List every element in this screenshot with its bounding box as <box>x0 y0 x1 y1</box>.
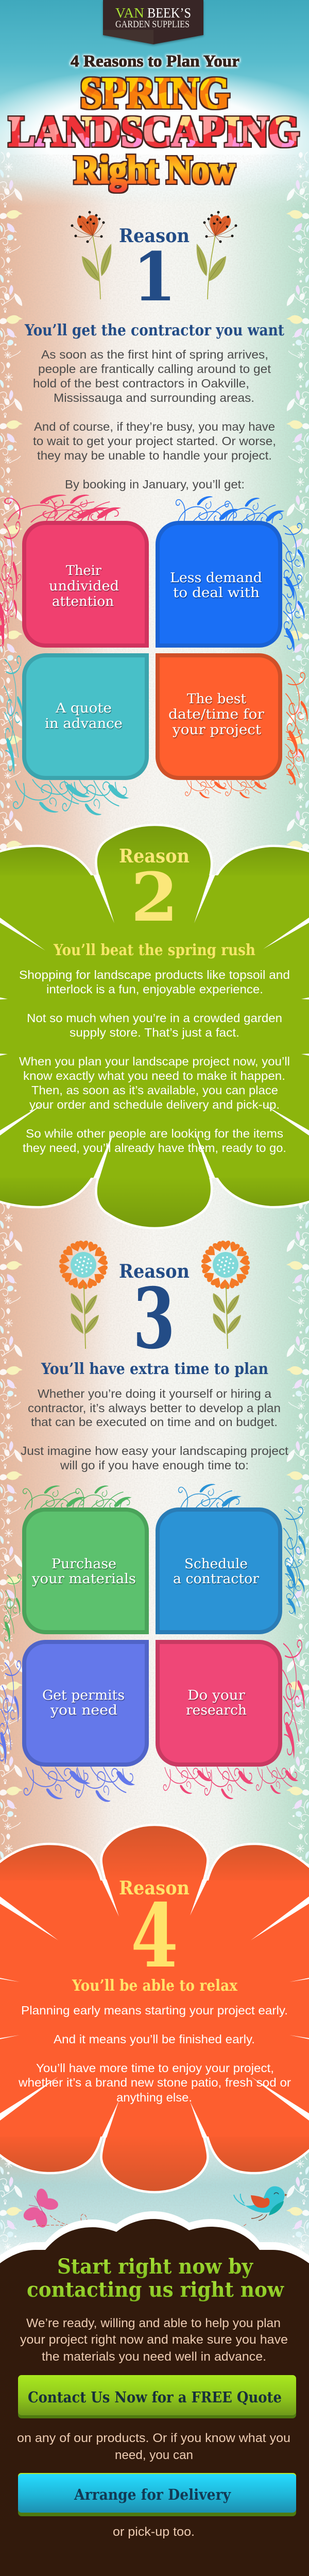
decorative swirls: benefits <box>0 495 307 815</box>
reason 2 body text: your order and schedule delivery and pick-up. <box>29 1098 280 1111</box>
button: arrange for delivery <box>18 2473 296 2516</box>
task: purchase your materials <box>22 1507 149 1634</box>
reason 2 body text: they need, you’ll already have them, ready to go. <box>23 1141 286 1155</box>
benefit: less demand to deal with: Less demand <box>170 570 262 586</box>
cta heading <box>27 2255 284 2302</box>
task: get permits you need: Get permits <box>42 1687 125 1703</box>
cta body text: the materials you need well in advance. <box>42 2350 266 2364</box>
green flower shape <box>0 825 309 1228</box>
title line: right now: Right Now <box>74 148 235 192</box>
benefit: the best date/time: date/time for <box>168 706 264 722</box>
text: on any of our products: on any of our products. Or if you know what you <box>17 2431 290 2445</box>
title line: 4 reasons: 4 Reasons to Plan Your <box>71 52 239 70</box>
reason 2 body text: know exactly what you need to make it happen. <box>23 1069 285 1082</box>
reason 2 body text: So while other people are looking for the items <box>26 1127 283 1140</box>
reason 1 body text: By booking in January, you’ll get: <box>65 478 245 491</box>
logo banner: VAN <box>115 5 144 21</box>
reason 1 body text: hold of the best contractors in Oakville, <box>33 377 249 390</box>
reason 2 body text: Not so much when you’re in a crowded garden <box>27 1011 282 1025</box>
reason 1 header <box>71 211 237 316</box>
task: get permits you need <box>22 1640 149 1767</box>
panel: reason 2 green flower <box>0 825 309 1228</box>
reason 2 body text: When you plan your landscape project now, you’ll <box>19 1055 290 1068</box>
task: purchase your materials: Purchase <box>52 1556 116 1572</box>
benefit: a quote in advance <box>22 653 149 780</box>
reason 3 body text <box>21 1387 289 1472</box>
task: schedule a contractor <box>156 1507 282 1634</box>
reason 1 body text: people are frantically calling around to get <box>38 362 271 376</box>
reason 1 number: 1 <box>133 238 176 316</box>
benefit: the best date/time: your project <box>172 722 261 738</box>
button: contact us <box>18 2375 296 2418</box>
reason 3 body text: Whether you’re doing it yourself or hiring a <box>38 1387 271 1400</box>
reason 2 body text: Shopping for landscape products like topsoil and <box>19 968 290 981</box>
reason 4 number: 4 <box>131 1885 178 1988</box>
text: on any of our products: need, you can <box>115 2448 193 2462</box>
cta heading: Start right now by <box>57 2255 254 2279</box>
reason 2 number: 2 <box>131 858 178 937</box>
reason 4 body text: And it means you’ll be finished early. <box>54 2032 255 2046</box>
reason 4 body text: whether it’s a brand new stone patio, fresh sod or <box>18 2076 291 2089</box>
task: schedule a contractor: a contractor <box>173 1571 259 1587</box>
cta body text: your project right now and make sure you have <box>20 2333 288 2347</box>
reason 4 body text: anything else. <box>116 2091 192 2104</box>
reason 1 body text: And of course, if they’re busy, you may have <box>34 420 275 433</box>
reason 1 body text: As soon as the first hint of spring arrives, <box>41 348 268 361</box>
reason 2 body text: Then, as soon as it’s available, you can place <box>31 1083 278 1097</box>
reason 2 body text: supply store. That’s just a fact. <box>70 1026 239 1039</box>
reason 3 heading: You’ll have extra time to plan <box>41 1360 268 1378</box>
cta heading: contacting us right now <box>27 2278 284 2302</box>
icon: bluebird <box>234 2186 287 2230</box>
icon: left sunflower <box>59 1241 108 1349</box>
icon: left heart flower <box>71 211 111 299</box>
logo banner: GARDEN SUPPLIES <box>115 19 190 30</box>
benefit: their undivided attention: Their <box>66 563 101 579</box>
benefit: the best date/time <box>156 653 282 780</box>
button: contact us: Contact Us Now for a FREE Quote <box>28 2388 282 2406</box>
reason 4 body text <box>18 2004 291 2104</box>
panel: reason 4 orange flower <box>0 1825 309 2192</box>
benefit: a quote in advance: in advance <box>45 716 123 732</box>
reason 4 heading: You’ll be able to relax <box>72 1977 238 1995</box>
button: arrange for delivery: Arrange for Delivery <box>74 2486 231 2503</box>
reason 3 number: 3 <box>133 1270 175 1368</box>
panel: four benefits <box>0 495 307 815</box>
benefit: the best date/time: The best <box>187 691 246 707</box>
icon: butterfly <box>22 2188 90 2229</box>
task: do your research: research <box>186 1702 247 1718</box>
reason 1 body text <box>33 348 276 491</box>
logo banner <box>103 0 203 44</box>
benefit: less demand to deal with: to deal with <box>173 585 260 601</box>
task: get permits you need: you need <box>50 1702 117 1718</box>
benefit: their undivided attention: undivided <box>49 578 119 594</box>
reason 4 body text: You’ll have more time to enjoy your project, <box>36 2061 274 2075</box>
title line: spring: SPRING <box>80 68 230 117</box>
text: or pick-up too: or pick-up too. <box>113 2525 195 2539</box>
panel: call to action <box>0 2211 309 2576</box>
decorative swirls: tasks <box>0 1484 305 1802</box>
reason 1 body text: they may be unable to handle your project. <box>37 449 272 462</box>
task: do your research: Do your <box>187 1687 245 1703</box>
reason 4 label: Reason <box>119 1877 190 1899</box>
reason 2 heading: You’ll beat the spring rush <box>53 941 255 959</box>
task: schedule a contractor: Schedule <box>184 1556 248 1572</box>
reason 2 label: Reason <box>119 845 190 867</box>
reason 1 body text: to wait to get your project started. Or worse, <box>33 434 276 448</box>
cta body text: We’re ready, willing and able to help you plan <box>26 2316 281 2330</box>
task: do your research <box>156 1640 282 1767</box>
benefit: a quote in advance: A quote <box>55 700 112 716</box>
icon: right heart flower <box>197 211 237 299</box>
text: on any of our products <box>17 2431 290 2462</box>
task: purchase your materials: your materials <box>31 1571 136 1587</box>
reason 2 body text <box>19 968 290 1155</box>
reason 3 header <box>59 1241 250 1368</box>
reason 3 body text: will go if you have enough time to: <box>60 1459 249 1472</box>
reason 3 body text: Just imagine how easy your landscaping project <box>21 1444 289 1458</box>
benefit: their undivided attention: attention <box>52 594 114 609</box>
reason 1 label: Reason <box>119 225 190 247</box>
reason 3 body text: contractor, it’s always better to develop a plan <box>28 1401 281 1415</box>
reason 3 label: Reason <box>119 1261 190 1282</box>
benefit: their undivided attention <box>22 521 149 648</box>
icon: right sunflower <box>201 1241 250 1349</box>
logo banner: BEEK’S <box>147 5 191 21</box>
title <box>9 52 299 192</box>
reason 4 body text: Planning early means starting your project early. <box>21 2004 288 2017</box>
orange flower shape <box>0 1825 309 2192</box>
cta body text <box>20 2316 288 2364</box>
reason 1 body text: Mississauga and surrounding areas. <box>54 391 254 404</box>
panel: four planning tasks <box>0 1484 305 1802</box>
reason 2 body text: interlock is a fun, enjoyable experience. <box>46 982 263 996</box>
reason 3 body text: that can be executed on time and on budget. <box>31 1415 278 1429</box>
benefit: less demand to deal with <box>156 521 282 648</box>
